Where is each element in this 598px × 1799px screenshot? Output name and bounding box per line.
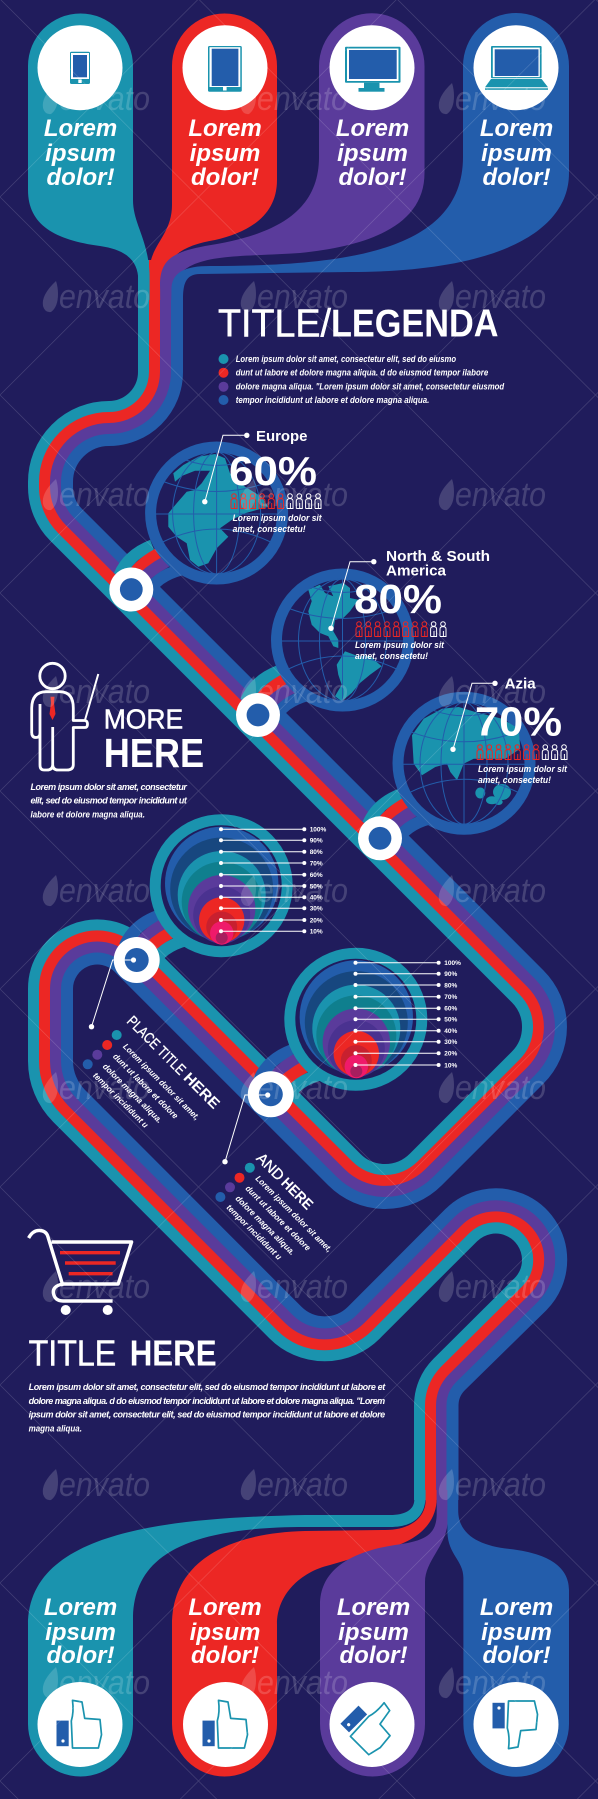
scale lines and labels: 20%	[310, 917, 323, 924]
legend list: Lorem ipsum dolor sit amet, consectetur elit, sed do eiusmo	[236, 354, 457, 364]
label: Lorem	[336, 115, 409, 142]
node	[236, 693, 280, 737]
label: ipsum	[190, 1619, 260, 1646]
caption	[233, 513, 323, 534]
label	[337, 1594, 410, 1669]
leader line	[450, 681, 498, 752]
heading: more here: MORE	[104, 703, 183, 734]
caption: Lorem ipsum dolor sit	[233, 513, 323, 523]
title: legend heading: LEGENDA	[331, 303, 498, 346]
region label: North & South	[386, 548, 490, 565]
leader line	[202, 433, 250, 504]
scale lines and labels: 80%	[310, 849, 323, 856]
scale lines and labels: 20%	[444, 1051, 458, 1058]
label: dolor!	[191, 164, 259, 191]
globe	[398, 697, 530, 829]
legend list: dunt ut labore et dolore magna aliqua. d do eiusmod tempor ilabore	[236, 368, 488, 378]
radial chart panel 2	[222, 953, 461, 1164]
label: dolor!	[47, 164, 114, 191]
icon: laptop	[485, 46, 548, 90]
label: Lorem	[188, 115, 262, 142]
caption: amet, consectetu!	[233, 524, 306, 534]
nested circles	[290, 953, 422, 1085]
node with pointer	[89, 937, 160, 1029]
heading	[253, 1150, 316, 1213]
label: dolor!	[47, 1642, 114, 1669]
heading: AND	[253, 1150, 287, 1185]
text block: title here: ipsum dolor sit amet, consectetur elit, sed do eiusmod tempor incididunt ut labore et dolore	[29, 1410, 385, 1420]
heading: HERE	[277, 1175, 316, 1213]
label: ipsum	[481, 140, 552, 167]
scale lines and labels: 90%	[444, 971, 458, 978]
percentage: 70%	[475, 699, 562, 745]
node	[109, 568, 153, 612]
heading: more here: HERE	[104, 730, 204, 776]
icon: tablet	[208, 46, 242, 92]
bottom pill: blue dislike	[447, 1490, 569, 1777]
rotated text: dolore magna aliqua.	[101, 1061, 165, 1125]
heading: title here: TITLE	[29, 1332, 116, 1373]
leader line	[328, 559, 376, 631]
scale lines and labels	[354, 960, 461, 1069]
label: ipsum	[45, 1619, 116, 1646]
caption	[355, 640, 445, 661]
label: ipsum	[481, 1619, 552, 1646]
flowing ribbon: purple strand	[56, 260, 550, 1500]
caption: Lorem ipsum dolor sit	[355, 640, 445, 650]
scale lines and labels: 10%	[310, 929, 323, 936]
label: ipsum	[190, 140, 260, 167]
region label: Europe	[256, 428, 308, 445]
label: dolor!	[339, 164, 406, 191]
label	[480, 115, 553, 191]
heading: more here	[104, 703, 204, 776]
heading	[123, 1013, 223, 1113]
rotated text: dunt ut labore et dolore	[111, 1051, 181, 1121]
scale lines and labels: 50%	[444, 1017, 458, 1024]
text block: more here	[30, 782, 188, 819]
icon: phone	[70, 52, 90, 84]
top pill: blue laptop	[171, 13, 569, 300]
people pictogram	[231, 494, 321, 508]
scale lines and labels: 60%	[310, 872, 323, 879]
legend list: tempor incididunt ut labore et dolore magna aliqua.	[236, 395, 429, 405]
bottom pill: purple tilted like	[320, 1490, 448, 1777]
text block: title here: dolore magna aliqua. d do eiusmod tempor incididunt ut labore et dolore magna aliqua. "Lorem	[29, 1396, 385, 1406]
scale lines and labels: 30%	[444, 1039, 458, 1046]
heading: HERE	[180, 1069, 223, 1113]
icon: tilted thumb	[339, 1691, 405, 1757]
label: Lorem	[480, 1594, 553, 1621]
scale lines and labels: 50%	[310, 883, 323, 890]
region label: Azia	[505, 676, 536, 693]
text block: more here: elit, sed do eiusmod tempor incididunt ut	[30, 796, 188, 806]
bottom pill: teal like	[28, 1490, 426, 1777]
scale lines and labels: 30%	[310, 906, 323, 913]
region label	[386, 548, 490, 580]
connector to ribbon	[119, 546, 181, 594]
label: Lorem	[480, 115, 553, 142]
connector to ribbon	[368, 794, 430, 843]
node	[358, 816, 402, 860]
rotated text: tempor incididunt u	[225, 1202, 285, 1262]
legend dots	[215, 1163, 255, 1202]
label: Lorem	[188, 1594, 262, 1621]
rotated text: Lorem ipsum dolor sit amet,	[254, 1173, 334, 1254]
heading: title here	[29, 1332, 217, 1373]
flowing ribbon: red strand	[45, 260, 539, 1500]
radial chart panel 1	[89, 820, 327, 1029]
nested circles	[155, 820, 287, 952]
scale lines and labels: 40%	[444, 1028, 458, 1035]
scale lines and labels: 90%	[310, 838, 323, 845]
connector to ribbon	[246, 671, 308, 720]
top pill: purple monitor	[160, 13, 424, 300]
heading: PLACE TITLE	[123, 1013, 189, 1079]
label: Lorem	[44, 1594, 117, 1621]
globe	[276, 574, 408, 706]
label	[44, 115, 117, 191]
text block: title here: magna aliqua.	[29, 1424, 82, 1434]
top pill: teal phone	[28, 14, 150, 300]
label: Lorem	[337, 1594, 410, 1621]
icon: monitor	[345, 47, 400, 92]
globe	[151, 447, 283, 579]
icon: presenter man	[32, 663, 98, 770]
title: legend heading	[218, 303, 498, 346]
rotated text: tempor incididunt u	[91, 1070, 151, 1130]
flowing ribbon: blue strand	[67, 260, 561, 1500]
node with pointer	[222, 1071, 294, 1164]
legend list	[218, 354, 505, 405]
diagonal block: and here	[215, 1150, 334, 1262]
people pictogram	[356, 622, 446, 636]
caption: Lorem ipsum dolor sit	[478, 764, 568, 774]
text block: more here: Lorem ipsum dolor sit amet, consectetur	[30, 782, 187, 792]
region label: America	[386, 562, 447, 580]
diagonal block: place title here	[83, 1013, 223, 1130]
text block: title here: Lorem ipsum dolor sit amet, consectetur elit, sed do eiusmod tempor incididunt ut labore et	[29, 1382, 386, 1392]
icon: thumbs up	[202, 1700, 248, 1748]
rotated text: dolore magna aliqua.	[234, 1193, 297, 1257]
caption: amet, consectetu!	[478, 775, 551, 785]
legend list: dolore magna aliqua. "Lorem ipsum dolor sit amet, consectetur eiusmod	[236, 382, 505, 392]
rotated text	[91, 1041, 202, 1130]
globe panel: Asia	[358, 676, 568, 860]
icon: shopping cart	[29, 1230, 132, 1315]
label	[188, 115, 262, 191]
scale lines and labels: 70%	[444, 994, 458, 1001]
label	[188, 1594, 262, 1669]
rotated text	[225, 1173, 334, 1262]
title: legend heading: TITLE/	[218, 303, 331, 346]
percentage: 80%	[354, 576, 442, 622]
scale lines and labels: 40%	[310, 895, 323, 902]
connector to ribbon	[125, 916, 187, 965]
label: dolor!	[483, 1642, 550, 1669]
label: ipsum	[45, 140, 116, 167]
caption	[478, 764, 568, 785]
label: ipsum	[337, 140, 408, 167]
scale lines and labels: 80%	[444, 982, 458, 989]
scale lines and labels	[219, 827, 327, 936]
top pill: red tablet	[150, 14, 277, 300]
label: dolor!	[483, 164, 550, 191]
label: dolor!	[340, 1642, 407, 1669]
icon: thumbs up	[56, 1700, 102, 1748]
people pictogram	[477, 745, 567, 760]
heading: title here: HERE	[130, 1332, 217, 1373]
text block: title here	[29, 1382, 386, 1434]
label: Lorem	[44, 115, 117, 142]
scale lines and labels: 70%	[310, 860, 323, 867]
scale lines and labels: 100%	[310, 827, 327, 834]
bottom pill: red like	[172, 1490, 437, 1777]
flowing ribbon: teal strand	[34, 260, 528, 1500]
globe panel: North and South America	[236, 548, 490, 737]
label	[44, 1594, 117, 1669]
legend dots	[83, 1030, 122, 1069]
icon: thumbs down	[492, 1701, 538, 1749]
text block: more here: labore et dolore magna aliqua.	[30, 809, 145, 819]
caption: amet, consectetu!	[355, 651, 428, 661]
label	[480, 1594, 553, 1669]
scale lines and labels: 60%	[444, 1006, 458, 1013]
percentage: 60%	[229, 448, 317, 494]
connector to ribbon	[259, 1050, 321, 1099]
rotated text: Lorem ipsum dolor sit amet,	[121, 1041, 202, 1122]
label: dolor!	[191, 1642, 259, 1669]
scale lines and labels: 100%	[444, 960, 461, 967]
globe panel: Europe	[109, 428, 323, 612]
label: ipsum	[338, 1619, 409, 1646]
rotated text: dunt ut labore et dolore	[244, 1183, 313, 1253]
label	[336, 115, 409, 191]
scale lines and labels: 10%	[444, 1062, 458, 1069]
